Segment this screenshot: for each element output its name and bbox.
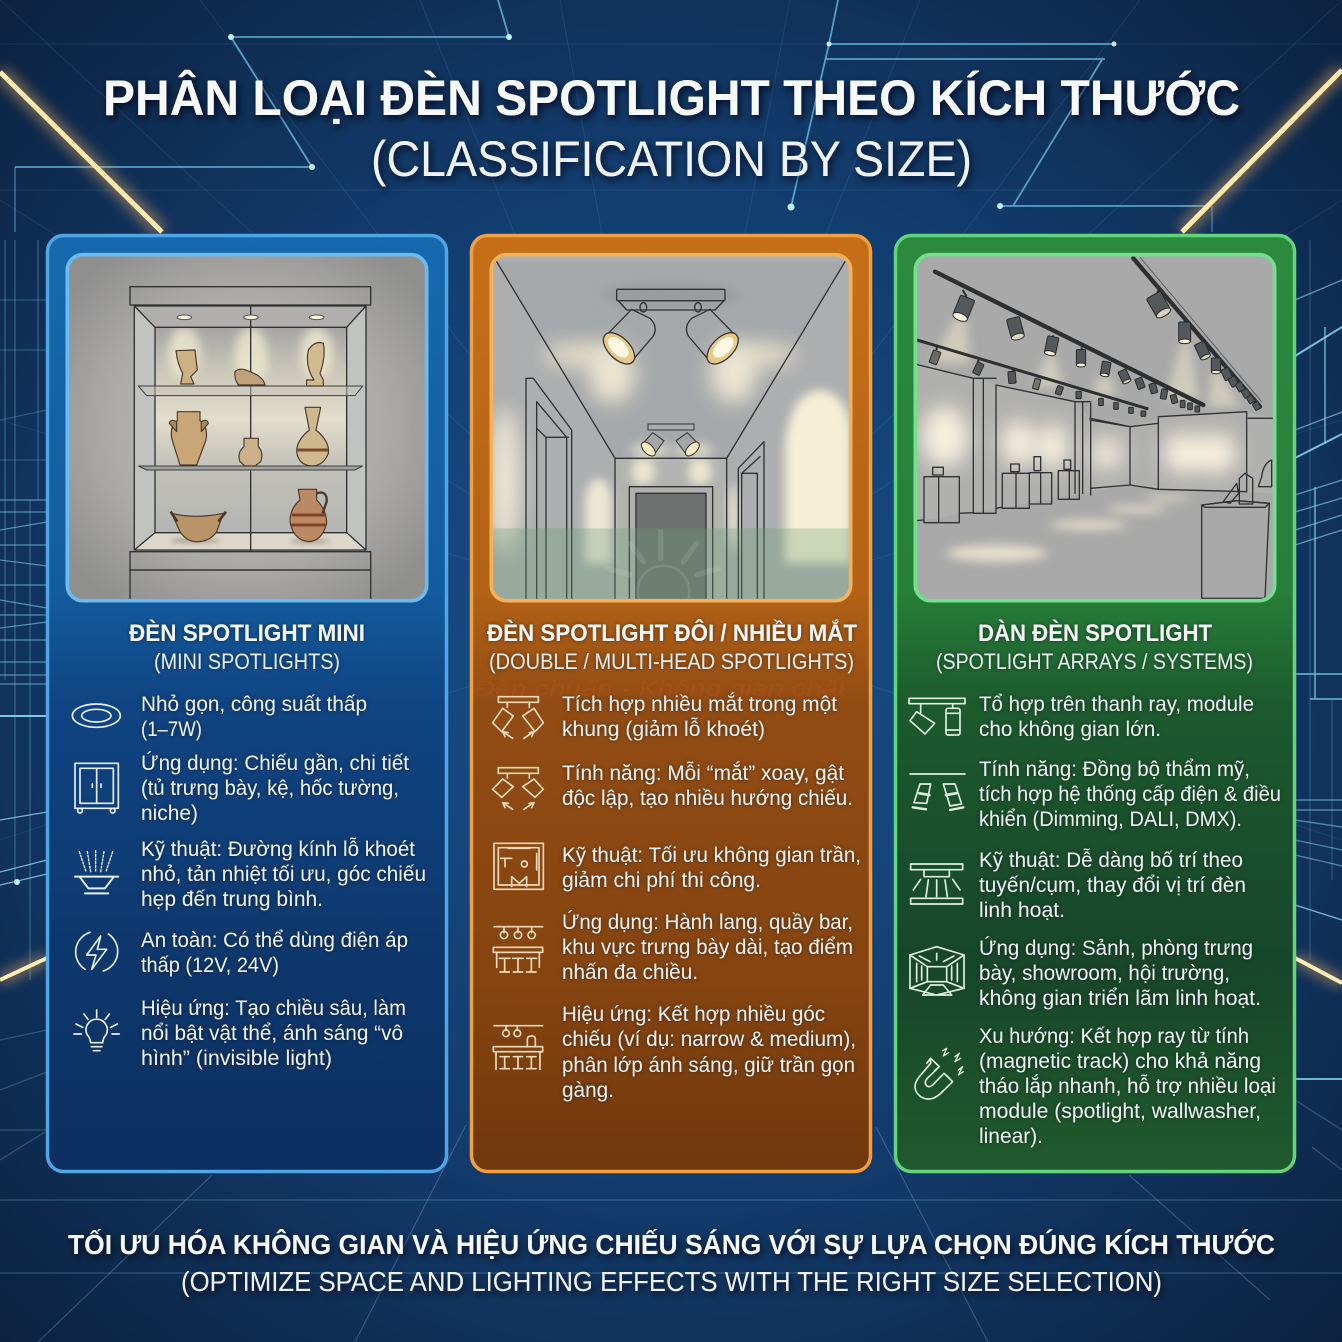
text list: giảm chi phí thi công. [562, 869, 761, 892]
text list: Kỹ thuật: Tối ưu không gian trần, [562, 844, 861, 867]
text list: Nhỏ gọn, công suất thấp [141, 693, 367, 716]
heading: (DOUBLE / MULTI-HEAD SPOTLIGHTS) [489, 649, 854, 674]
text list: (magnetic track) cho khả năng [979, 1050, 1261, 1073]
heading: ĐÈN SPOTLIGHT MINI [129, 619, 365, 647]
top circuit lines [15, 0, 1212, 232]
text list: cho không gian lớn. [979, 718, 1161, 741]
icons column [909, 698, 965, 1099]
icon: low voltage bolt [76, 932, 118, 971]
panel: spotlight arrays / systems [896, 236, 1294, 1172]
large fixture [602, 284, 739, 365]
icon: track modules [909, 698, 965, 735]
text list: (tủ trưng bày, kệ, hốc tường, [141, 777, 399, 800]
text list: chiếu (ví dụ: narrow & medium), [562, 1028, 856, 1051]
text list: khung (giảm lỗ khoét) [562, 718, 765, 741]
panel frame: blue [48, 236, 446, 1172]
text list: nhấn đa chiều. [562, 961, 698, 984]
light beams [0, 70, 1342, 983]
text list: Kỹ thuật: Dễ dàng bố trí theo [979, 849, 1243, 872]
icon: light bulb [74, 1010, 119, 1051]
text list: Ứng dụng: Sảnh, phòng trưng [979, 937, 1253, 960]
text list: Tính năng: Đồng bộ thẩm mỹ, [979, 758, 1250, 781]
icon: track and synchronized spots [910, 774, 965, 810]
track heads [929, 290, 1261, 416]
icon: bar counter layered lighting [493, 1026, 543, 1069]
text list [562, 693, 861, 1102]
icon: linear ceiling module [911, 864, 963, 904]
artifacts [170, 538, 330, 544]
text list: tích hợp hệ thống cấp điện & điều [979, 783, 1281, 806]
text list: phân lớp ánh sáng, giữ trần gọn [562, 1054, 855, 1077]
text list: nhỏ, tản nhiệt tối ưu, góc chiếu [141, 863, 426, 886]
title [103, 70, 1240, 187]
footer tagline: (OPTIMIZE SPACE AND LIGHTING EFFECTS WITH THE RIGHT SIZE SELECTION) [181, 1266, 1162, 1297]
title: (CLASSIFICATION BY SIZE) [371, 131, 972, 187]
bottom grid [0, 1100, 1342, 1342]
tracks [935, 272, 1203, 405]
watermark: Đèn chuẩn - Không gian chất [474, 676, 847, 701]
text list: độc lập, tạo nhiều hướng chiếu. [562, 787, 853, 810]
text list: nổi bật vật thể, ánh sáng “vô [141, 1022, 403, 1045]
text list: (1–7W) [141, 718, 202, 741]
panel: double / multi-head spotlights [472, 236, 870, 1172]
footer tagline [68, 1228, 1275, 1297]
icon: cabinet [75, 763, 118, 813]
text list: niche) [141, 802, 198, 825]
text list: Tổ hợp trên thanh ray, module [979, 693, 1254, 716]
text list [979, 693, 1281, 1148]
text list: Hiệu ứng: Tạo chiều sâu, làm [141, 997, 406, 1020]
small fixture [639, 424, 702, 458]
icon: bar with pendant spots [493, 927, 543, 972]
text list: bày, showroom, hội trường, [979, 962, 1230, 985]
text list: khu vực trưng bày dài, tạo điểm [562, 936, 853, 959]
text list: Hiệu ứng: Kết hợp nhiều góc [562, 1003, 825, 1026]
heading [129, 619, 365, 674]
icons column [72, 704, 120, 1051]
heading: DÀN ĐÈN SPOTLIGHT [978, 619, 1212, 647]
heading: ĐÈN SPOTLIGHT ĐÔI / NHIỀU MẮT [487, 619, 857, 647]
panel frame: orange [472, 236, 870, 1172]
icon: narrow beam fixture [75, 851, 118, 893]
text list: tháo lắp nhanh, hỗ trợ nhiều loại [979, 1075, 1276, 1098]
text list: Tính năng: Mỗi “mắt” xoay, gật [562, 762, 844, 785]
walls and pillars [915, 364, 1273, 521]
panel: mini spotlights [48, 236, 446, 1172]
right circuit lines [1295, 240, 1342, 1079]
text list: gàng. [562, 1079, 614, 1102]
text list: Kỹ thuật: Đường kính lỗ khoét [141, 838, 415, 861]
text list: hẹp đến trung bình. [141, 888, 323, 911]
heading [487, 619, 857, 674]
watermark in image [605, 529, 714, 599]
icon: exhibition room [910, 947, 964, 995]
illustration: gallery with track lighting [915, 254, 1275, 601]
text list: Ứng dụng: Hành lang, quầy bar, [562, 911, 853, 934]
icon: swivel heads [493, 768, 543, 809]
wall washes [922, 407, 1237, 473]
heading: (SPOTLIGHT ARRAYS / SYSTEMS) [936, 649, 1253, 674]
icon: magnetic track [915, 1048, 963, 1099]
text list: module (spotlight, wallwasher, [979, 1100, 1261, 1123]
illustration: corridor with twin-head spotlights [490, 254, 851, 618]
text list: Xu hướng: Kết hợp ray từ tính [979, 1025, 1249, 1048]
heading [936, 619, 1253, 674]
text list: linh hoạt. [979, 899, 1065, 922]
text list: Tích hợp nhiều mắt trong một [562, 693, 837, 716]
title: PHÂN LOẠI ĐÈN SPOTLIGHT THEO KÍCH THƯỚC [103, 70, 1240, 126]
panel frame: green [896, 236, 1294, 1172]
heading: (MINI SPOTLIGHTS) [154, 649, 340, 674]
footer tagline: TỐI ƯU HÓA KHÔNG GIAN VÀ HIỆU ỨNG CHIẾU SÁNG VỚI SỰ LỰA CHỌN ĐÚNG KÍCH THƯỚC [68, 1228, 1275, 1260]
text list: An toàn: Có thể dùng điện áp [141, 929, 408, 952]
icon: ceiling plan [494, 843, 543, 889]
text list [141, 693, 426, 1070]
spot lights [177, 315, 324, 320]
text list: hình” (invisible light) [141, 1047, 332, 1070]
text list: khiển (Dimming, DALI, DMX). [979, 808, 1242, 831]
text list: không gian triển lãm linh hoạt. [979, 987, 1261, 1010]
icon: recessed downlight [72, 704, 120, 727]
left circuit lines [0, 240, 47, 1130]
icon: double head with arrows [493, 697, 543, 738]
illustration: glass display cabinet with mini spotlights [67, 254, 427, 601]
icons column [493, 697, 543, 1069]
text list: Ứng dụng: Chiếu gần, chi tiết [141, 752, 409, 775]
shelves [138, 386, 363, 396]
text list: tuyến/cụm, thay đổi vị trí đèn [979, 874, 1246, 897]
text list: thấp (12V, 24V) [141, 954, 279, 977]
text list: linear). [979, 1125, 1043, 1148]
